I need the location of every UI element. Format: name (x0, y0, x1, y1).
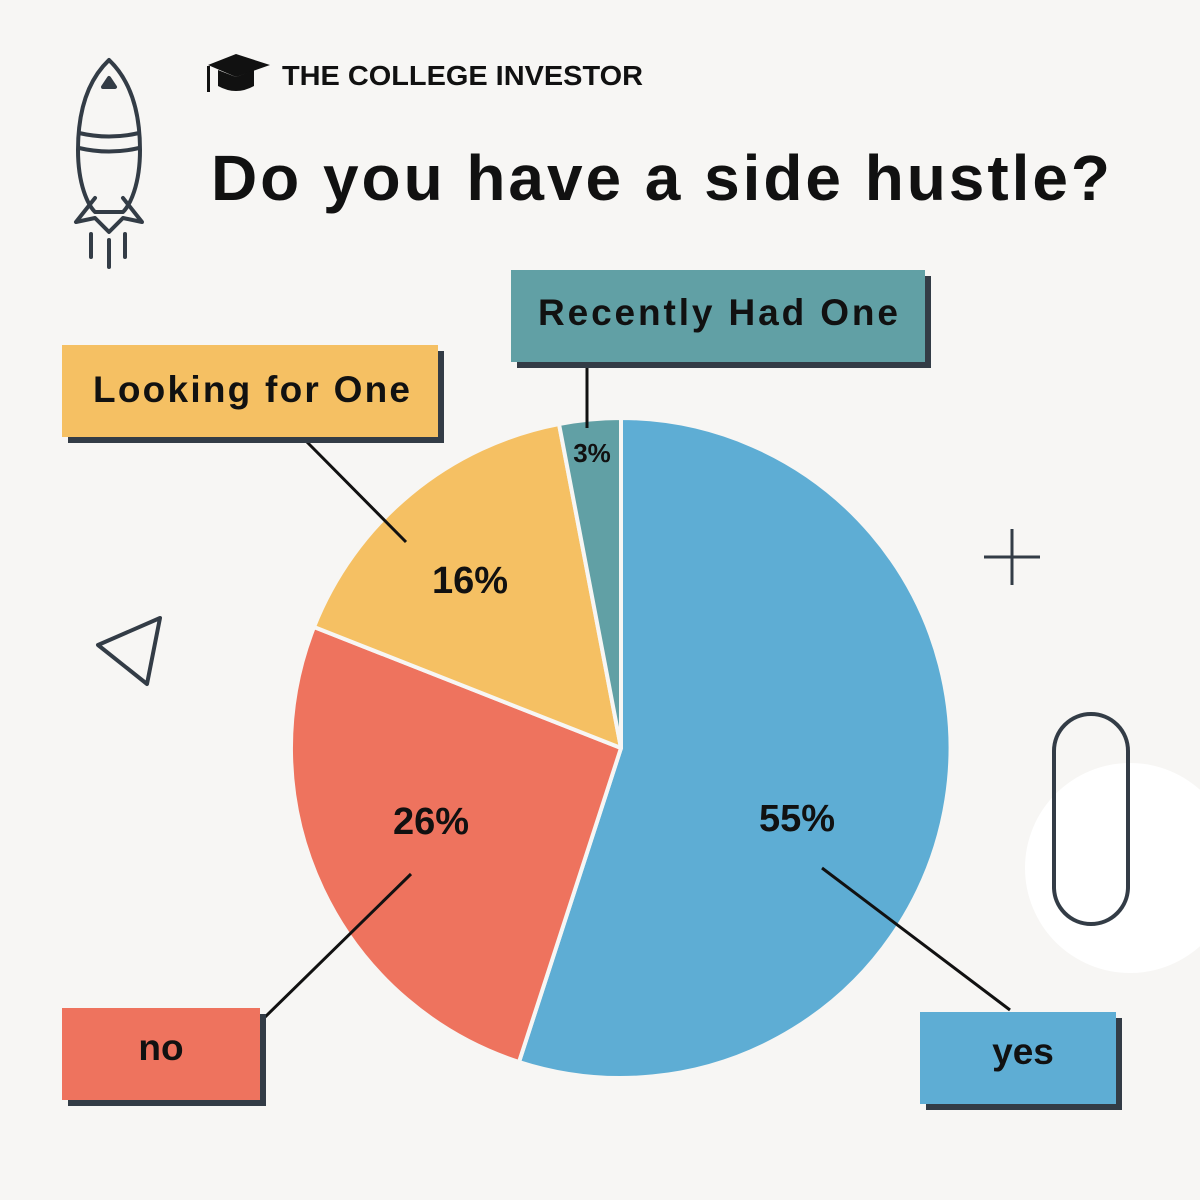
icon: graduation cap (207, 54, 270, 92)
logo: THE COLLEGE INVESTOR (282, 60, 643, 91)
label: Recently Had One (511, 270, 931, 368)
label: no: no (138, 1027, 184, 1068)
title: Do you have a side hustle? (211, 142, 1110, 214)
icon: triangle (98, 618, 160, 684)
icon: rocket (76, 60, 142, 267)
label: no (62, 1008, 266, 1106)
pie values: 3% (573, 438, 611, 468)
pie values: 16% (432, 560, 508, 602)
pie values: 55% (759, 798, 835, 840)
logo (207, 54, 643, 92)
pie values: 26% (393, 801, 469, 843)
label: Looking for One: Looking for One (93, 369, 410, 410)
icon: plus (984, 529, 1040, 585)
label: yes (920, 1012, 1122, 1110)
icon: paperclip pill (1054, 714, 1128, 924)
pie chart (291, 418, 951, 1078)
label: yes: yes (992, 1031, 1054, 1072)
pie values (393, 438, 835, 843)
label: Looking for One (62, 345, 444, 443)
leader lines (262, 362, 1010, 1020)
decorative white circle (1025, 763, 1200, 973)
label: Recently Had One: Recently Had One (538, 292, 898, 333)
